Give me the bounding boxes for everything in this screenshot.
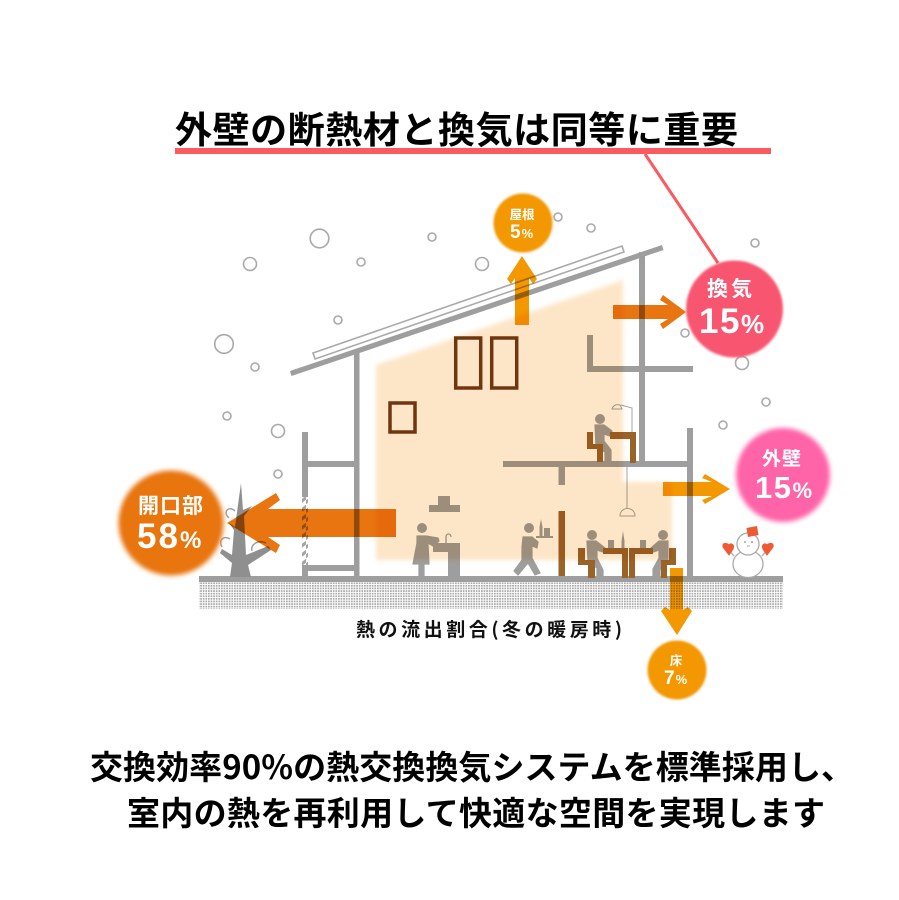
title underline — [175, 148, 771, 154]
arrow: roof — [507, 256, 537, 325]
badge: wall 15%: 外壁 — [762, 444, 802, 471]
badge: openings 58%: 58% — [137, 517, 203, 556]
badge: floor 7% — [648, 640, 706, 700]
arrow: floor — [661, 568, 692, 635]
closing text line 1: 交換効率90%の熱交換換気システムを標準採用し、 — [90, 741, 854, 789]
badge: ventilation 15% — [686, 260, 783, 358]
ground — [199, 576, 783, 609]
arrow: wall — [663, 474, 730, 504]
arrow: ventilation — [613, 295, 686, 329]
title: 外壁の断熱材と換気は同等に重要 — [175, 100, 738, 154]
kitchen figure and counter — [413, 496, 460, 578]
badge: floor 7%: 7% — [664, 668, 688, 689]
dining figures and tables — [578, 530, 676, 578]
lower lamp — [620, 467, 635, 516]
warm interior area — [376, 280, 672, 560]
badge: wall 15% — [736, 428, 830, 522]
badge: openings 58%: 開口部 — [138, 490, 204, 520]
badge: ventilation 15%: 換気 — [707, 273, 755, 303]
brown partition — [558, 511, 565, 576]
tree — [220, 483, 271, 577]
snowman — [723, 526, 773, 578]
badge: roof 5% — [494, 194, 552, 252]
badge: wall 15%: 15% — [755, 470, 814, 505]
hatched opening — [302, 497, 308, 565]
badge: roof 5%: 5% — [510, 222, 534, 243]
badge: floor 7%: 床 — [670, 650, 683, 669]
windows — [390, 338, 517, 432]
snowflakes — [215, 213, 770, 478]
badge: openings 58% — [118, 470, 224, 576]
chart caption: 熱の流出割合(冬の暖房時) — [356, 615, 622, 642]
closing text line 2: 室内の熱を再利用して快適な空間を実現します — [127, 787, 825, 835]
upper floor figure at desk — [587, 405, 636, 463]
arrow: openings — [227, 493, 396, 553]
waiter figure — [514, 519, 553, 575]
badge: ventilation 15%: 15% — [699, 302, 766, 341]
house structure — [290, 245, 693, 580]
badge: roof 5%: 屋根 — [509, 204, 535, 223]
callout line — [645, 154, 718, 263]
